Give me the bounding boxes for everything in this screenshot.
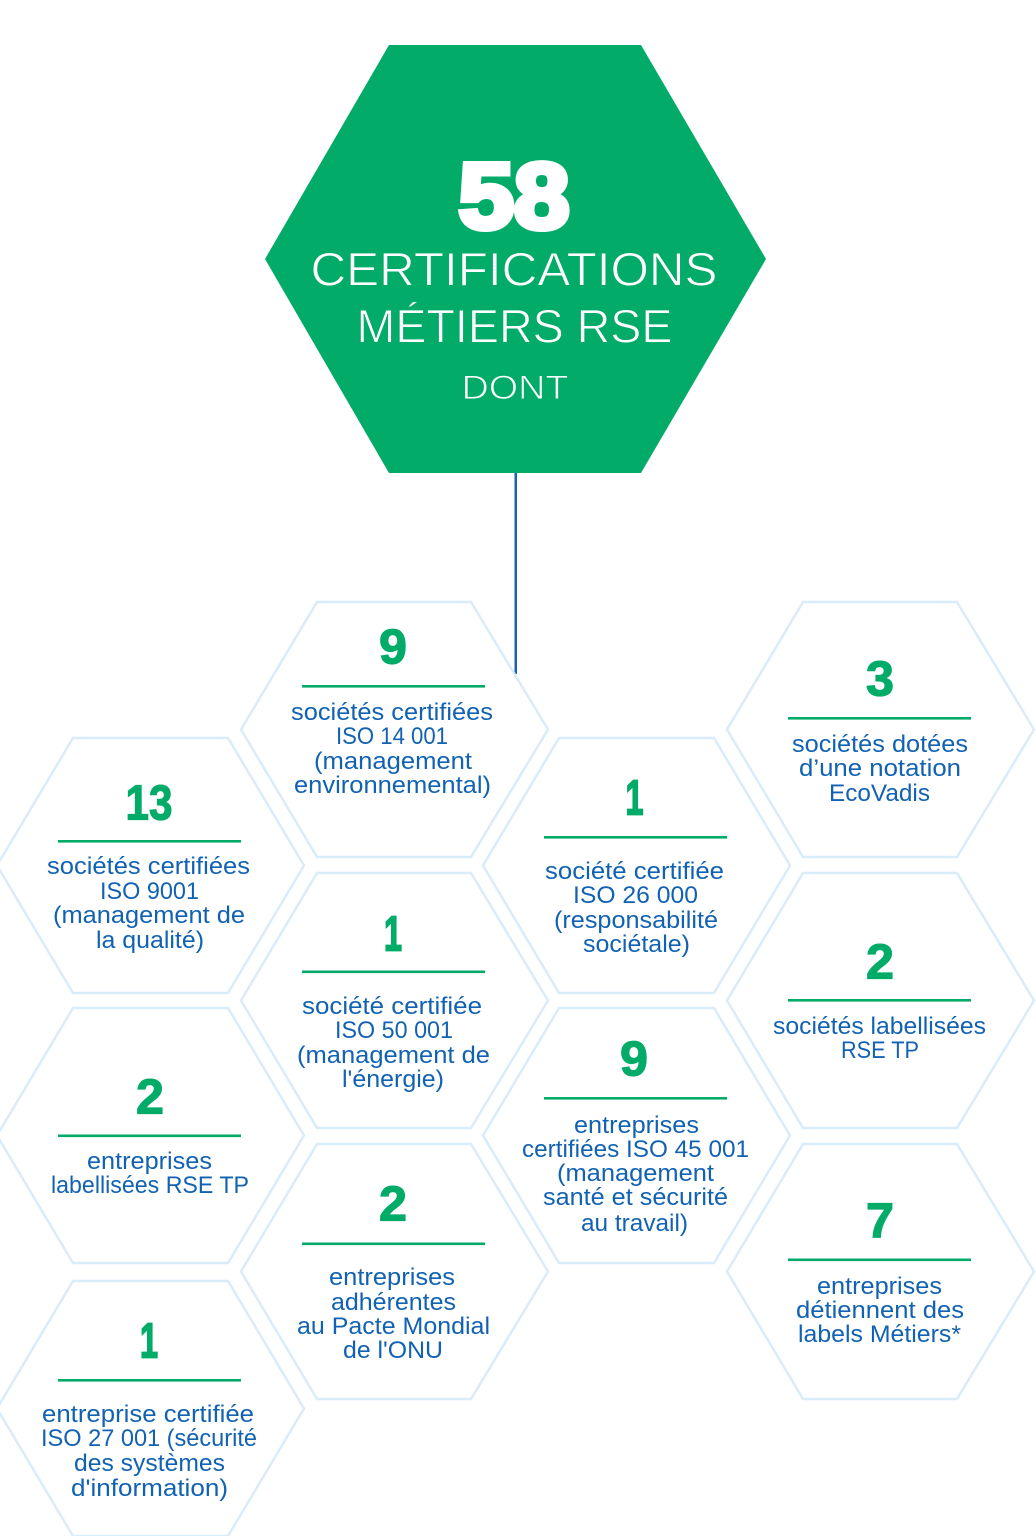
connector line (514, 470, 517, 674)
description: RSE TP (841, 1037, 919, 1064)
description: la qualité) (96, 927, 204, 954)
description: des systèmes (74, 1450, 225, 1477)
number: 9 (379, 620, 407, 674)
total number: 58 (458, 144, 570, 248)
panel: 9 ISO 45 001 (483, 1008, 790, 1263)
description: ISO 50 001 (335, 1017, 453, 1044)
number: 13 (126, 776, 172, 830)
description: labels Métiers* (798, 1321, 961, 1348)
description: ISO 14 001 (336, 723, 448, 750)
number: 2 (866, 936, 894, 990)
rule (58, 1379, 241, 1382)
description: entreprises (87, 1148, 212, 1175)
hexagon shape (265, 45, 766, 473)
panel: 2 sociétés RSE TP (727, 873, 1034, 1128)
number: 1 (140, 1314, 158, 1368)
description: d’une notation (799, 755, 961, 782)
description: ISO 27 001 (sécurité (41, 1425, 257, 1452)
panel: 7 labels Métiers (727, 1144, 1034, 1399)
description: certifiées ISO 45 001 (522, 1136, 749, 1163)
hexagon (727, 873, 1034, 1128)
heading line 2: MÉTIERS RSE (356, 300, 672, 352)
heading line 1: CERTIFICATIONS (310, 242, 718, 296)
description: sociétés dotées (792, 731, 968, 758)
description: (management de (297, 1042, 490, 1069)
description: sociétés certifiées (291, 699, 493, 726)
description: entreprise certifiée (42, 1401, 254, 1428)
number: 3 (866, 652, 894, 706)
dont label: DONT (462, 369, 568, 407)
panel: 1 ISO 26 000 (483, 738, 790, 993)
description: au travail) (581, 1210, 688, 1237)
number: 9 (620, 1032, 648, 1086)
hexagon (727, 602, 1034, 857)
rule (58, 840, 241, 843)
rule (788, 999, 971, 1002)
panel: 3 EcoVadis (727, 602, 1034, 857)
hexagon (0, 738, 304, 993)
description: entreprises (329, 1264, 455, 1291)
rule (788, 1258, 971, 1261)
description: ISO 26 000 (573, 882, 698, 909)
number: 1 (384, 908, 402, 962)
description: sociétés certifiées (47, 853, 250, 880)
rule (544, 1097, 727, 1100)
description: entreprises (574, 1112, 699, 1139)
hexagon (0, 1008, 304, 1263)
description: détiennent des (796, 1297, 964, 1324)
rule (302, 685, 485, 688)
rule (302, 1242, 485, 1245)
description: santé et sécurité (543, 1184, 728, 1211)
description: au Pacte Mondial (297, 1313, 490, 1340)
description: environnemental) (294, 772, 491, 799)
panel: 13 ISO 9001 (0, 738, 304, 993)
rule (788, 717, 971, 720)
panel: 1 ISO 50 001 (241, 873, 548, 1128)
hexagon (0, 1281, 304, 1536)
description: (responsabilité (554, 907, 718, 934)
hexagon (483, 738, 790, 993)
hexagon (241, 1144, 548, 1399)
description: l'énergie) (342, 1066, 444, 1093)
description: (management de (53, 902, 245, 929)
description: sociétés labellisées (773, 1013, 986, 1040)
description: de l'ONU (343, 1337, 443, 1364)
description: (management (557, 1160, 714, 1187)
panel: 2 entreprises RSE TP (0, 1008, 304, 1263)
description: labellisées RSE TP (51, 1172, 249, 1199)
hexagon (241, 873, 548, 1128)
rule (302, 970, 485, 973)
description: adhérentes (331, 1289, 456, 1316)
description: EcoVadis (829, 780, 930, 807)
description: d'information) (71, 1475, 228, 1502)
description: société certifiée (302, 993, 482, 1020)
panel: 1 ISO 27 001 (0, 1281, 304, 1536)
number: 2 (136, 1070, 164, 1124)
rule (58, 1134, 241, 1137)
hexagon (241, 602, 548, 857)
panel: 9 ISO 14 001 (241, 602, 548, 857)
description: société certifiée (545, 858, 724, 885)
description: entreprises (817, 1273, 942, 1300)
number: 2 (379, 1178, 407, 1232)
number: 7 (866, 1194, 894, 1248)
hexagon (727, 1144, 1034, 1399)
description: (management (314, 748, 472, 775)
rule (544, 836, 727, 839)
hexagon (483, 1008, 790, 1263)
description: ISO 9001 (100, 878, 199, 905)
panel: 2 Pacte Mondial (241, 1144, 548, 1399)
number: 1 (626, 772, 644, 826)
description: sociétale) (583, 931, 690, 958)
main hexagon: 58 certifications (265, 45, 766, 473)
